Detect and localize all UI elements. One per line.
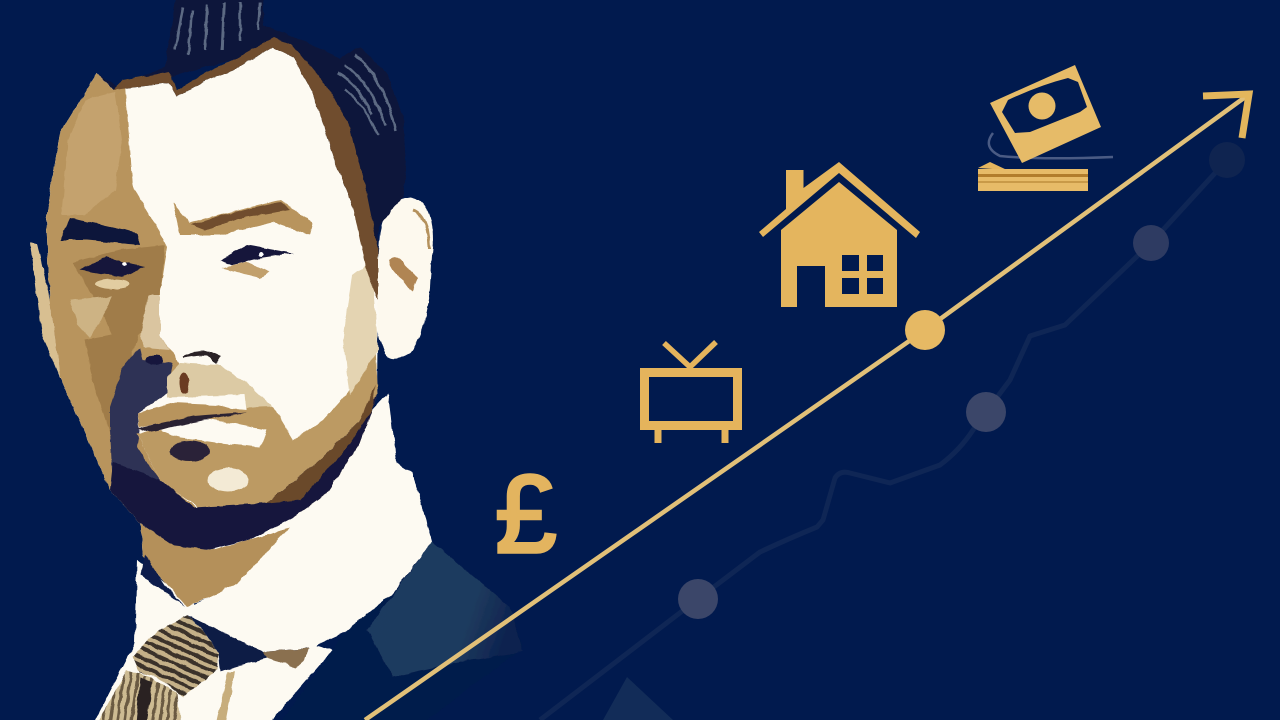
face base bbox=[46, 47, 378, 550]
dark hair bbox=[97, 0, 406, 280]
cheek beige patch bbox=[343, 260, 378, 395]
nose shadow bbox=[146, 352, 221, 393]
icon: pound sign: £ bbox=[495, 453, 557, 576]
icon: television bbox=[644, 342, 738, 443]
necktie bbox=[88, 615, 218, 720]
jaw tan bbox=[137, 340, 378, 517]
collar bbox=[187, 463, 432, 652]
neck bbox=[140, 393, 397, 607]
lower lip highlight bbox=[160, 418, 267, 447]
faint background chart line bbox=[540, 142, 1245, 720]
cheek highlight bbox=[70, 296, 112, 338]
portrait: man in suit bbox=[30, 0, 523, 720]
left eye bbox=[80, 257, 145, 277]
collar shadow bbox=[187, 615, 310, 672]
eye socket shade bbox=[72, 245, 165, 432]
hair brown hairline bbox=[113, 38, 378, 300]
upper lip highlight bbox=[167, 395, 247, 410]
right ear bbox=[373, 197, 433, 359]
beard bbox=[110, 393, 378, 550]
suit jacket bbox=[268, 542, 523, 720]
chin highlight bbox=[208, 468, 248, 492]
moustache-side shadow bbox=[110, 347, 173, 495]
nose side lit wedge bbox=[140, 295, 170, 350]
right eye bbox=[220, 245, 293, 278]
under-eye highlight bbox=[96, 279, 130, 289]
left eyebrow bbox=[60, 218, 140, 245]
shirt placket fold bbox=[213, 672, 235, 720]
left ear bbox=[30, 243, 70, 380]
icon: banknote and stack of money bbox=[978, 65, 1113, 191]
face shadow left bbox=[46, 73, 200, 523]
chin shadow bbox=[170, 441, 210, 461]
forehead side shade bbox=[62, 92, 122, 215]
rising gold trend line with arrow bbox=[365, 94, 1249, 720]
icon: house bbox=[759, 162, 920, 307]
shirt bbox=[85, 560, 332, 720]
hair strands bbox=[175, 2, 396, 135]
mouth bbox=[138, 403, 247, 432]
right eyebrow bbox=[173, 200, 313, 235]
beard brown edge bbox=[267, 385, 375, 503]
moustache beige bbox=[167, 363, 273, 408]
